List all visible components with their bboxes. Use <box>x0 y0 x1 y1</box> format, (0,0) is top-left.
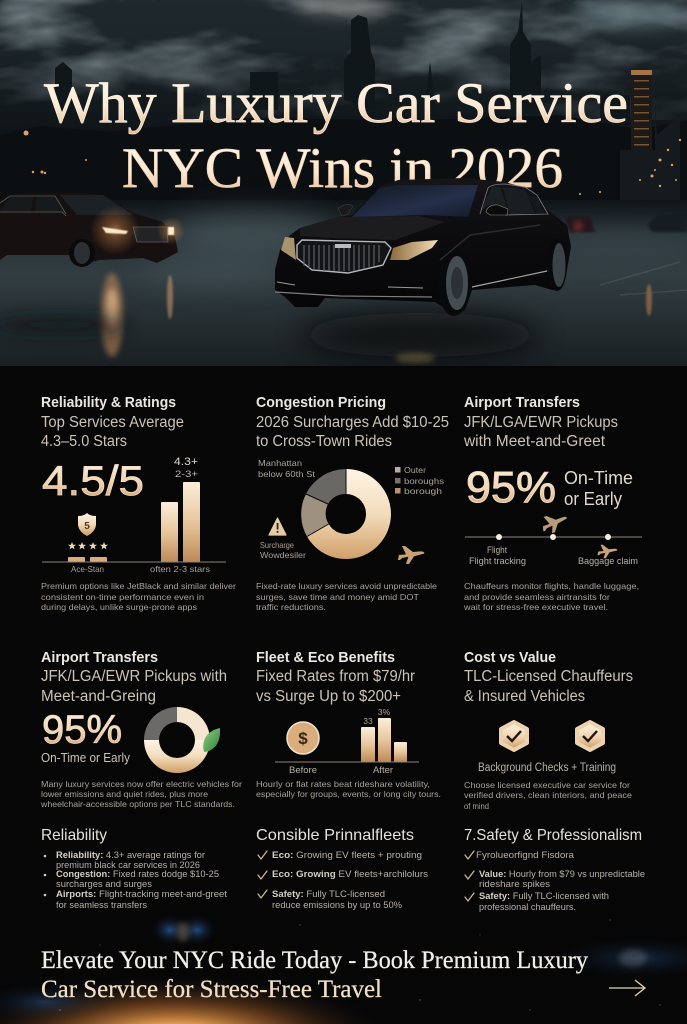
body text <box>40 779 242 809</box>
bar chart: before vs after: Before <box>289 765 317 776</box>
body text: wheelchair-accessible options per TLC standards. <box>40 799 235 809</box>
heading <box>256 649 415 705</box>
stormy sky <box>0 0 687 235</box>
call to action: Car Service for Stress-Free Travel <box>41 976 382 1003</box>
stat: 95% on-time: or Early <box>564 489 622 509</box>
title: NYC Wins in 2026 <box>122 137 563 200</box>
icon: arrow <box>609 980 645 996</box>
bullet list: premium black car services in 2026 <box>56 860 200 871</box>
body text <box>256 779 441 799</box>
timeline: Flight tracking <box>469 556 526 567</box>
heading: Reliability & Ratings <box>41 394 176 411</box>
legend <box>395 465 444 496</box>
black luxury sedan <box>275 178 571 316</box>
badge caption: Background Checks + Training <box>478 762 616 774</box>
heading: 2026 Surcharges Add $10-25 <box>256 414 449 431</box>
body text: traffic reductions. <box>256 602 326 612</box>
panel: cost vs value <box>464 649 633 811</box>
check list: Safety: Fully TLC-licensed <box>272 889 385 900</box>
call to action: Elevate Your NYC Ride Today - Book Premium Luxury <box>41 947 588 974</box>
heading: TLC-Licensed Chauffeurs <box>464 668 633 685</box>
body text <box>256 581 437 612</box>
bar chart: before vs after: After <box>373 765 393 776</box>
body text: consistent on-time performance even in <box>41 592 204 602</box>
heading: to Cross-Town Rides <box>256 433 392 450</box>
stat: 95% on-time: On-Time <box>564 468 633 488</box>
icon: check badge left <box>501 722 527 750</box>
call to action <box>41 947 645 1003</box>
heading <box>41 649 227 705</box>
chart labels: below 60th St <box>258 469 316 479</box>
bar chart: ratings: Ace-Stan <box>71 564 104 574</box>
heading: Congestion Pricing <box>256 394 386 411</box>
panel: consible prinnalfleets list <box>256 827 428 911</box>
heading: 7.Safety & Professionalism <box>464 827 642 844</box>
body text: Choose licensed executive car service for <box>464 780 630 790</box>
check list: Fyrolueorfignd Fisdora <box>476 850 575 861</box>
heading <box>256 394 449 450</box>
body text: Hourly or flat rates beat rideshare volatility, <box>256 779 430 789</box>
check list: Eco: Growing EV fleets + prouting <box>272 850 422 861</box>
icon: check badge right <box>577 722 603 750</box>
chart labels <box>258 458 316 560</box>
body text <box>463 581 639 612</box>
bullet list <box>44 850 227 911</box>
donut chart with leaf <box>144 707 220 773</box>
body text: Premium options like JetBlack and similar deliver <box>41 581 236 591</box>
title: Why Luxury Car Service <box>44 72 628 135</box>
body text: lower emissions and quiet rides, plus more <box>41 789 208 799</box>
icon: plane <box>540 511 570 535</box>
chart labels: Manhattan <box>258 458 302 468</box>
stat: 95%: 95% <box>42 708 122 752</box>
body text: during delays, unlike surge-prone apps <box>41 602 197 612</box>
panel: reliability & ratings <box>41 394 236 612</box>
heading: Reliability <box>41 827 107 844</box>
title <box>44 72 628 200</box>
heading: Cost vs Value <box>464 649 556 666</box>
heading: & Insured Vehicles <box>464 688 585 705</box>
check list: reduce emissions by up to 50% <box>272 900 403 911</box>
heading: Airport Transfers <box>464 394 580 411</box>
stat: 95%: On-Time or Early <box>41 751 131 765</box>
body text <box>41 581 236 612</box>
wet road <box>0 200 687 366</box>
bullet list: Congestion: Fixed rates dodge $10-25 <box>56 869 219 880</box>
heading <box>463 394 618 450</box>
heading: Airport Transfers <box>41 649 158 666</box>
body text <box>464 780 632 811</box>
panel: fleet & eco benefits <box>256 649 441 799</box>
body text: especially for groups, events, or long city tours. <box>256 789 441 799</box>
heading: Meet-and-Greing <box>41 688 156 705</box>
check list: Safety: Fully TLC-licensed with <box>479 891 609 902</box>
stat: 4.5/5: 4.5/5 <box>42 457 144 504</box>
body text: Fixed-rate luxury services avoid unpredictable <box>256 581 437 591</box>
stat: 95% on-time: 95% <box>466 463 556 512</box>
bullet list: Reliability: 4.3+ average ratings for <box>56 850 205 861</box>
heading: JFK/LGA/EWR Pickups <box>464 414 618 431</box>
heading: Fixed Rates from $79/hr <box>256 668 415 685</box>
legend: boroughs <box>404 476 444 486</box>
check list: Eco: Growing EV fleets+archilolurs <box>272 869 428 880</box>
bar chart: ratings: often 2-3 stars <box>150 564 210 574</box>
bullet list: for seamless transfers <box>56 900 147 911</box>
icon: shield badge with stars <box>68 513 108 562</box>
timeline: Baggage claim <box>578 556 638 567</box>
body text: of mind <box>464 801 489 811</box>
check list: rideshare spikes <box>479 879 550 890</box>
timeline: Flight <box>487 545 507 556</box>
bar chart: before vs after: 33 <box>363 716 373 726</box>
hero photo: rainy city at night <box>0 0 687 366</box>
donut chart <box>301 469 391 559</box>
body text: and provide seamless airtransits for <box>464 592 610 602</box>
body text: verified drivers, clean interiors, and peace <box>464 790 632 800</box>
panel: airport transfers (second row) <box>40 649 242 809</box>
icon: shield badge with stars: 5 <box>84 521 90 532</box>
heading <box>464 649 633 705</box>
heading <box>41 394 184 450</box>
check list: professional chauffeurs. <box>479 902 576 913</box>
heading: with Meet-and-Greet <box>463 433 606 450</box>
bullet list: Airports: Flight-tracking meet-and-greet <box>56 889 227 900</box>
panel: congestion pricing <box>256 394 449 612</box>
heading: 4.3–5.0 Stars <box>41 433 127 450</box>
bullet list: surcharges and surges <box>56 879 152 890</box>
body text: surges, save time and money amid DOT <box>256 592 419 602</box>
icon: plane <box>398 546 424 564</box>
heading: Fleet & Eco Benefits <box>256 649 395 666</box>
background car, left <box>0 192 185 267</box>
stat: 95% on-time <box>466 463 633 512</box>
panel: safety & professionalism list <box>464 827 645 913</box>
icon: warning triangle <box>269 518 286 535</box>
heading: Top Services Average <box>41 414 184 431</box>
bar chart: before vs after <box>275 707 419 776</box>
body text: wait for stress-free executive travel. <box>463 602 608 612</box>
panel: reliability list <box>41 827 227 911</box>
legend: borough <box>404 486 442 496</box>
bar chart: before vs after: 3% <box>378 707 391 717</box>
bottom background glow <box>0 366 687 1024</box>
body text: Chauffeurs monitor flights, handle luggage, <box>464 581 639 591</box>
chart labels: Wowdesiler <box>260 550 306 560</box>
legend: Outer <box>404 465 426 475</box>
check list <box>258 850 428 911</box>
chart labels: Surcharge <box>260 540 294 550</box>
body text: Many luxury services now offer electric vehicles for <box>41 779 242 789</box>
bar chart: ratings: 4.3+ <box>174 456 198 468</box>
heading: JFK/LGA/EWR Pickups with <box>41 668 227 685</box>
icon: leaf <box>203 728 220 752</box>
icon: dollar coin <box>287 722 319 754</box>
bar chart: ratings: 2-3+ <box>175 469 199 480</box>
check list: Value: Hourly from $79 vs unpredictable <box>479 869 645 880</box>
stat: 95% <box>41 708 131 765</box>
timeline <box>465 534 642 567</box>
city skyline <box>0 0 687 215</box>
icon: dollar coin: $ <box>298 729 308 748</box>
bar chart: ratings <box>42 456 226 574</box>
heading: Consible Prinnalfleets <box>256 827 414 844</box>
panel: airport transfers <box>463 394 642 612</box>
heading: vs Surge Up to $200+ <box>256 688 401 705</box>
background car, right <box>565 212 687 232</box>
check list <box>465 850 645 913</box>
